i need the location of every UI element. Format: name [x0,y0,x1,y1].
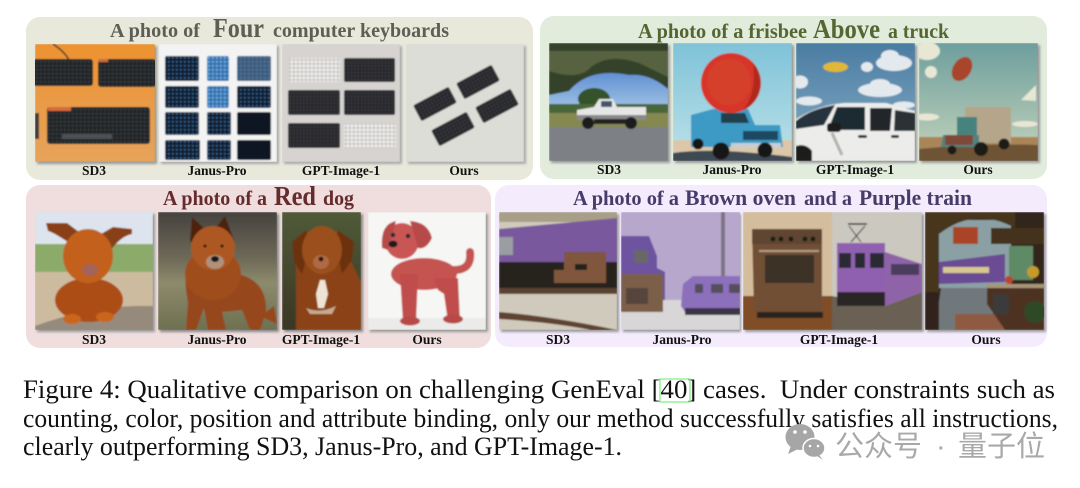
model labels: dog: Ours [412,332,442,347]
caption: clearly outperforming SD3, Janus-Pro, and GPT-Image-1. [23,432,622,461]
image: GPT-Image-1 frisbee [792,43,917,163]
heading: red dog prompt: dog [323,186,354,210]
heading: red dog prompt [163,180,354,211]
image: Ours keyboards [406,44,526,164]
icon: chat bubbles [786,424,825,460]
model labels: keyboards: Janus-Pro [187,163,247,178]
heading: oven and train prompt: A photo of a [573,186,679,210]
model labels: keyboards: Ours [449,163,479,178]
image: Ours frisbee [914,42,1040,163]
watermark [786,424,1045,463]
model labels: dog: GPT-Image-1 [282,332,360,347]
model labels: dog: Janus-Pro [187,332,247,347]
heading: oven and train prompt: Purple train [859,185,972,210]
model labels: oven and train: Ours [971,332,1001,347]
panel: frisbee above a truck [540,13,1047,179]
image: GPT-Image-1 keyboards [282,44,402,164]
image: Janus-Pro keyboards [159,44,279,164]
heading: frisbee prompt: A photo of a frisbee [638,19,807,43]
model labels: dog [82,332,442,347]
heading: keyboards prompt [110,13,449,43]
watermark: 公众号 [835,431,922,463]
heading: oven and train prompt [573,185,972,210]
heading: keyboards prompt: A photo of [110,20,201,42]
caption: counting, color, position and attribute binding, only our method successfully satisfies all instructions, [23,404,1058,433]
model labels: dog: SD3 [82,332,106,347]
panel: red dog [26,180,491,348]
image: GPT-Image-1 oven and train [743,212,924,332]
image: Janus-Pro oven [621,212,741,332]
model labels: oven and train: GPT-Image-1 [800,332,878,347]
image: Janus-Pro dog [158,212,279,332]
image: Ours scene [925,212,1046,332]
panel: brown oven and purple train [495,185,1047,347]
heading: frisbee prompt [638,13,949,44]
model labels: frisbee: Janus-Pro [702,162,762,177]
image: SD3 dog [35,212,155,332]
image: SD3 train [499,212,619,332]
caption: Figure 4: Qualitative comparison on challenging GenEval [40] cases. Under constraints such as [23,375,1055,404]
heading: oven and train prompt: and a [804,188,852,210]
model labels: keyboards [82,163,479,178]
watermark: 量子位 [958,430,1045,463]
model labels: oven and train: Janus-Pro [652,332,712,347]
panel: four computer keyboards [26,13,533,180]
model labels: keyboards: GPT-Image-1 [302,163,380,178]
model labels: frisbee [597,162,993,177]
model labels: frisbee: GPT-Image-1 [816,162,894,177]
heading: keyboards prompt: computer keyboards [273,20,449,42]
image: SD3 keyboards [33,44,157,164]
heading: red dog prompt: A photo of a [163,186,267,210]
model labels: oven and train [546,332,1001,347]
watermark: · [936,431,946,463]
image: Janus-Pro frisbee [673,43,794,163]
image: SD3 truck [549,43,670,163]
model labels: frisbee: Ours [963,162,993,177]
image: GPT-Image-1 dog [282,212,363,332]
model labels: keyboards: SD3 [82,163,106,178]
caption [23,375,1058,461]
image: Ours dog [368,212,488,332]
heading: keyboards prompt: Four [213,13,264,43]
heading: frisbee prompt: a truck [888,19,949,43]
heading: frisbee prompt: Above [813,13,880,44]
model labels: oven and train: SD3 [546,332,570,347]
model labels: frisbee: SD3 [597,162,621,177]
heading: oven and train prompt: Brown oven [685,185,796,210]
heading: red dog prompt: Red [274,180,316,211]
